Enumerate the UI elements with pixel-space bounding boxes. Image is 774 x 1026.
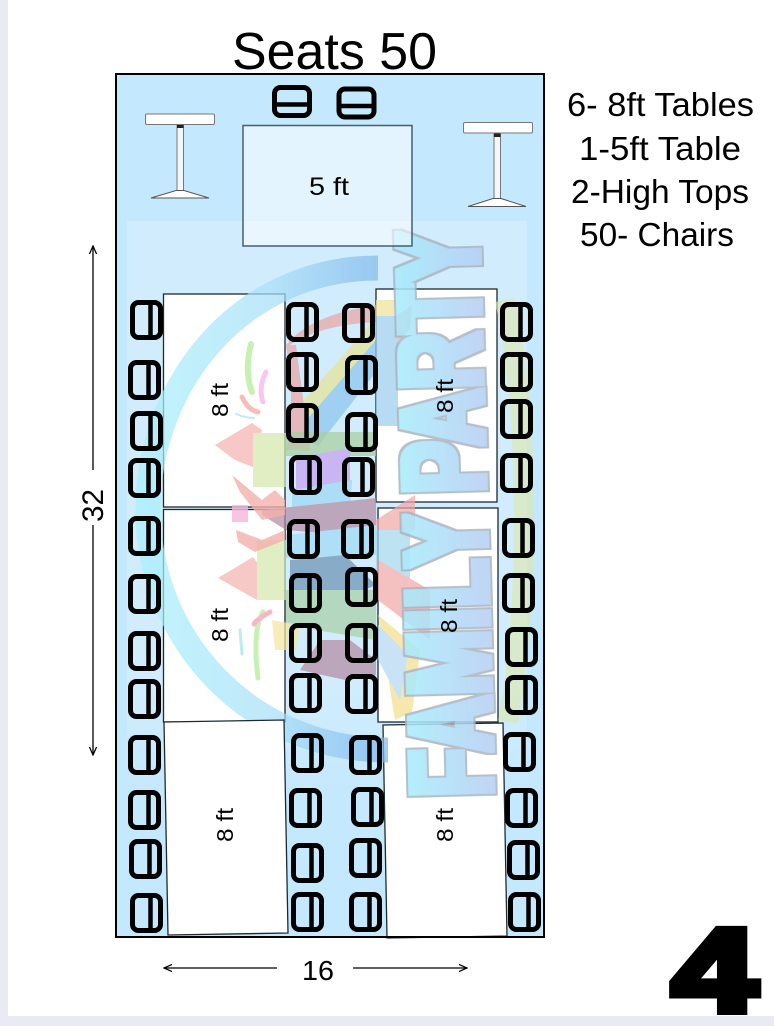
inventory list: 2-High Tops (571, 173, 749, 210)
chairs: far left column (130, 302, 160, 931)
label: 8 ft left lower: 8 ft (212, 807, 238, 842)
logo slides (286, 300, 412, 450)
logo figures (232, 475, 285, 552)
table: 8 ft left middle (164, 510, 285, 722)
high top left (146, 114, 214, 198)
room floor (116, 74, 544, 937)
table: 8 ft right upper (376, 289, 497, 502)
label: 8 ft right middle: 8 ft (436, 598, 462, 633)
label: 8 ft left middle: 8 ft (207, 607, 233, 642)
dimension: 16 width: 16 (302, 955, 334, 986)
watermark logo (148, 230, 524, 799)
chairs: centre right column (344, 305, 382, 930)
chairs: far right column (502, 304, 538, 930)
room outline (116, 74, 544, 937)
table: 5 ft: 5 ft (309, 173, 349, 201)
logo castle (215, 423, 430, 720)
label: 8 ft right lower: 8 ft (432, 807, 458, 842)
chairs: centre left column (288, 304, 322, 930)
table: 8 ft right middle (378, 508, 498, 722)
logo fireworks (236, 344, 270, 678)
label: 8 ft left upper: 8 ft (207, 382, 233, 417)
high top right (464, 122, 532, 206)
logo ring (148, 268, 388, 750)
inventory list (567, 86, 754, 253)
inventory list: 50- Chairs (580, 216, 734, 253)
table: 8 ft left upper (164, 294, 285, 507)
logo backing panel (127, 221, 527, 799)
inventory list: 6- 8ft Tables (567, 86, 754, 123)
logo side glow (505, 300, 524, 722)
chairs: top pair (274, 88, 374, 117)
label: 8 ft right upper: 8 ft (432, 378, 458, 413)
inventory list: 1-5ft Table (579, 130, 741, 167)
dimension: 32 length: 32 (77, 489, 110, 522)
title: Seats 50 (232, 23, 437, 81)
table: 5 ft (243, 126, 412, 246)
table: 8 ft right lower (383, 723, 507, 938)
table: 8 ft left lower (164, 720, 288, 935)
